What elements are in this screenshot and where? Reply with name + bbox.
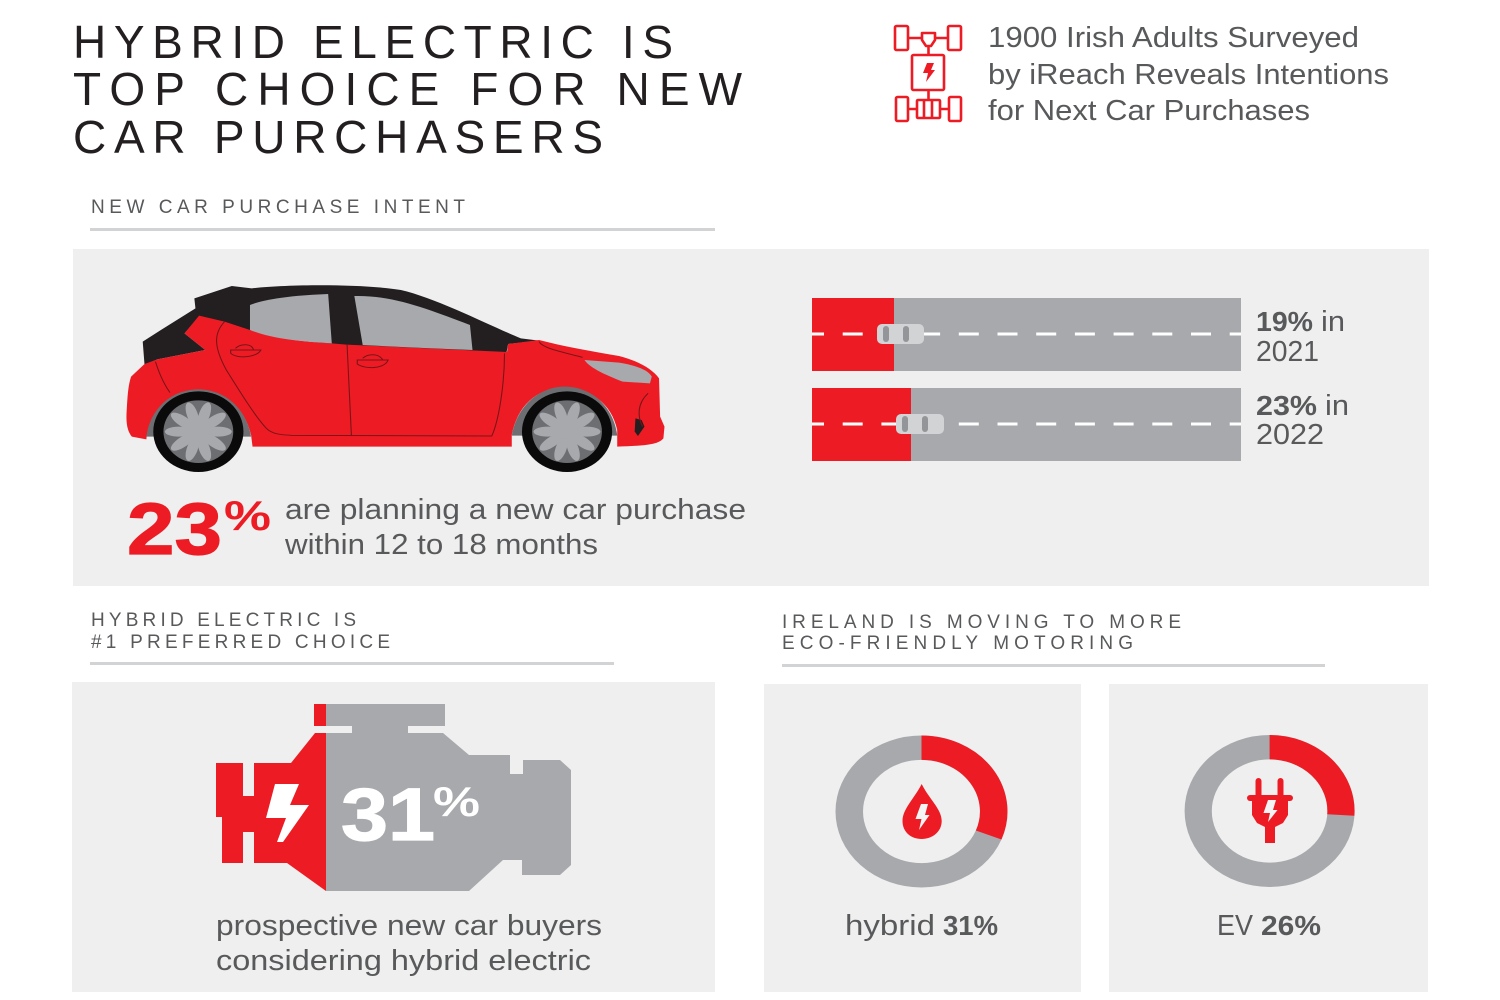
text: purchase plans (284, 494, 746, 561)
title: TOP CHOICE FOR NEW (73, 63, 743, 115)
icon: engine 31 percent (216, 704, 571, 891)
panel: EV donut (1109, 684, 1428, 992)
heading: hybrid preferred choice (90, 610, 614, 665)
survey intro text (988, 22, 1389, 127)
icon: car top view 2022 (896, 414, 944, 434)
donut chart: hybrid 31 percent (849, 748, 994, 875)
survey intro text: by iReach Reveals Intentions (988, 59, 1389, 91)
icon: car top view 2021 (877, 324, 924, 344)
label: EV 26% (1217, 910, 1321, 942)
illustration: red car (126, 285, 664, 472)
label: 19% in 2021: in (1321, 306, 1345, 338)
road bar: 2021 (812, 298, 1241, 371)
road bar: 2022 (812, 388, 1241, 461)
survey intro text: for Next Car Purchases (988, 95, 1310, 127)
icon: fuel drop (902, 784, 942, 839)
heading: new car purchase intent (90, 197, 715, 231)
label: hybrid 31%: 31% (943, 910, 998, 941)
label: 19% in 2021: 2021 (1256, 336, 1319, 368)
heading: new car purchase intent: NEW CAR PURCHASE INTENT (91, 197, 465, 218)
heading: hybrid preferred choice: HYBRID ELECTRIC IS (91, 610, 356, 631)
text: purchase plans: are planning a new car purchase (285, 494, 746, 526)
survey intro text: 1900 Irish Adults Surveyed (988, 22, 1359, 54)
icon: electric drivetrain (895, 26, 961, 121)
text: purchase plans: within 12 to 18 months (284, 529, 598, 561)
text: prospective buyers (216, 910, 602, 977)
label: 19% in 2021 (1256, 306, 1345, 368)
label: 23% in 2022: 2022 (1256, 419, 1324, 451)
text: prospective buyers: considering hybrid electric (216, 945, 591, 977)
label: hybrid 31%: hybrid (845, 910, 935, 942)
panel: hybrid donut (764, 684, 1081, 992)
stat: 23 percent: 23 (127, 489, 222, 570)
label: EV 26%: EV (1217, 910, 1254, 942)
donut chart: EV 26 percent (1198, 747, 1341, 875)
stat: 23 percent (127, 489, 271, 570)
icon: engine 31 percent: % (433, 778, 480, 825)
stat: 23 percent: % (224, 492, 271, 539)
heading: eco-friendly motoring: ECO-FRIENDLY MOTORING (782, 633, 1133, 654)
panel: new car purchase intent (73, 249, 1429, 586)
label: hybrid 31% (845, 910, 998, 942)
heading: eco-friendly motoring: IRELAND IS MOVING TO MORE (782, 612, 1181, 633)
text: prospective buyers: prospective new car buyers (216, 910, 602, 942)
title (73, 16, 743, 163)
heading: hybrid preferred choice: #1 PREFERRED CHOICE (91, 632, 390, 653)
label: EV 26%: 26% (1261, 910, 1321, 941)
icon: engine 31 percent: 31 (341, 773, 435, 856)
title: HYBRID ELECTRIC IS (73, 16, 673, 68)
label: 23% in 2022: 23% (1256, 390, 1317, 421)
title: CAR PURCHASERS (73, 111, 603, 163)
icon: electric plug (1247, 778, 1293, 843)
label: 23% in 2022: in (1325, 390, 1349, 422)
label: 23% in 2022 (1256, 390, 1349, 451)
panel: hybrid preferred choice (72, 682, 715, 992)
heading: eco-friendly motoring (782, 612, 1325, 667)
label: 19% in 2021: 19% (1256, 306, 1313, 337)
